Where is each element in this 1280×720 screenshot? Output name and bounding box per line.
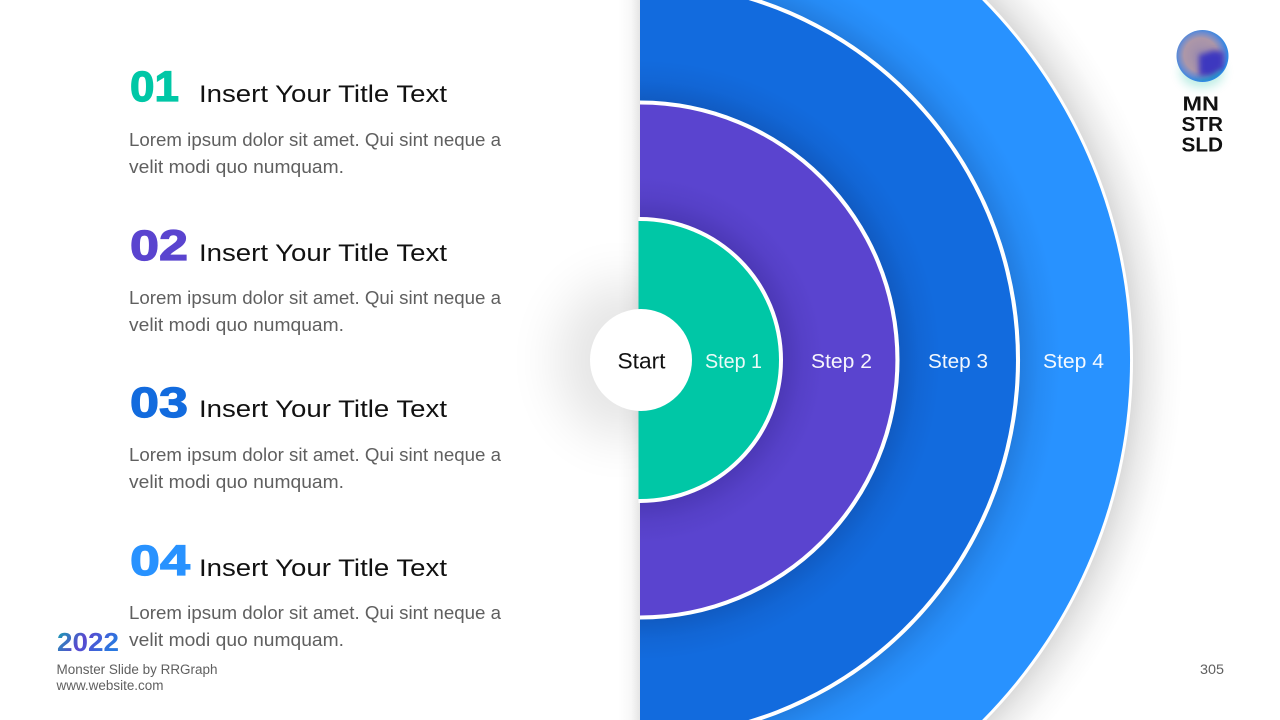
logo text: STR <box>1182 114 1224 136</box>
ring: step 3 <box>640 0 1140 720</box>
item 01: velit modi quo numquam. <box>129 157 344 177</box>
ring: step 1 <box>638 177 823 543</box>
logo text <box>1182 94 1224 156</box>
item 03: velit modi quo numquam. <box>129 472 344 492</box>
footer: Monster Slide by RRGraph <box>56 662 218 677</box>
item 02: Lorem ipsum dolor sit amet. Qui sint neque a <box>129 288 502 308</box>
item 03: 03 <box>130 379 188 427</box>
footer: www.website.com <box>56 678 164 693</box>
item 02 <box>129 222 502 335</box>
item 02: velit modi quo numquam. <box>129 315 344 335</box>
item 03: Lorem ipsum dolor sit amet. Qui sint neque a <box>129 445 502 465</box>
step labels: Step 2 <box>811 351 872 373</box>
step labels: Step 4 <box>1043 351 1104 373</box>
step labels <box>705 351 1104 373</box>
item 01: Insert Your Title Text <box>199 81 447 108</box>
logo text: SLD <box>1182 134 1223 156</box>
footer <box>56 627 218 693</box>
item 01: Lorem ipsum dolor sit amet. Qui sint neque a <box>129 130 502 150</box>
radial shadow behind start <box>558 282 682 438</box>
item 04: velit modi quo numquam. <box>129 630 344 650</box>
start circle: Start <box>618 348 666 374</box>
item 04: 04 <box>130 537 190 585</box>
chart: concentric half circles <box>638 0 1280 720</box>
item 02: Insert Your Title Text <box>199 240 447 267</box>
logo text: MN <box>1182 94 1219 116</box>
ring: step 4 <box>640 0 1280 720</box>
step labels: Step 1 <box>705 351 762 373</box>
item 03: Insert Your Title Text <box>199 396 447 423</box>
footer: 2022 <box>57 627 119 657</box>
item 04: Insert Your Title Text <box>199 555 447 582</box>
item 01 <box>129 63 502 177</box>
item 01: 01 <box>130 63 179 111</box>
item 04: Lorem ipsum dolor sit amet. Qui sint neque a <box>129 603 502 623</box>
start circle <box>590 309 692 411</box>
edge shadow <box>618 0 640 720</box>
logo <box>1176 30 1228 156</box>
item 04 <box>129 537 502 650</box>
step labels: Step 3 <box>928 351 988 373</box>
page number: 305 <box>1200 662 1224 677</box>
item 03 <box>129 379 502 492</box>
icon: sphere <box>1176 30 1228 88</box>
item 02: 02 <box>130 222 188 270</box>
ring: step 2 <box>640 60 940 660</box>
